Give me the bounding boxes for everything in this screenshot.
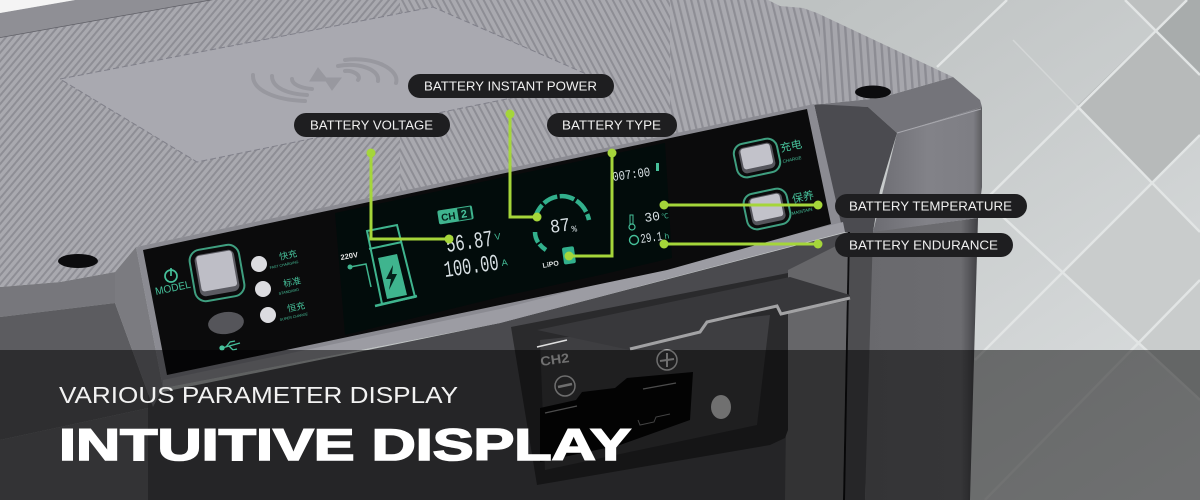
area right of the lid <box>785 240 848 500</box>
clock readout: 007:00 <box>611 165 651 185</box>
channel tag: 2 <box>460 208 468 221</box>
maintain button: 保养 <box>791 188 815 206</box>
icon: charging station: 220V <box>340 250 359 262</box>
title: INTUITIVE DISPLAY <box>59 421 631 470</box>
callout: battery temperature: BATTERY TEMPERATURE <box>849 200 1012 214</box>
battery gauge: % <box>571 224 578 235</box>
temperature readout: 30 <box>643 209 661 226</box>
mode indicators: 快充 <box>278 247 298 262</box>
body: central front <box>148 232 848 500</box>
compartment recess <box>540 315 770 470</box>
callout: battery instant power <box>408 74 614 222</box>
output compartment <box>511 273 850 485</box>
model button <box>188 243 246 303</box>
callout: battery instant power: BATTERY INSTANT POWER <box>424 80 597 94</box>
battery gauge: 87 <box>549 214 572 239</box>
bottom dark overlay band <box>0 350 1200 500</box>
icon: USB <box>220 341 240 350</box>
holes <box>58 254 98 268</box>
callout: battery voltage: BATTERY VOLTAGE <box>310 118 433 132</box>
corner: dark facet <box>814 104 897 232</box>
voltage and current readout: A <box>501 257 508 268</box>
mode indicators: STANDARD <box>278 288 300 296</box>
mode indicators: 恒充 <box>286 299 306 314</box>
temperature readout: ℃ <box>661 212 669 221</box>
callout: battery type: BATTERY TYPE <box>562 118 661 132</box>
body: left upper band <box>0 272 115 317</box>
callout: battery voltage <box>294 113 454 244</box>
body: left recessed area <box>0 303 153 440</box>
panel bezel <box>136 104 843 388</box>
callout: battery endurance <box>660 233 1013 257</box>
power icon and MODEL label <box>154 268 192 298</box>
endurance readout: h <box>664 231 670 241</box>
wireless charging pad <box>60 7 600 162</box>
charge button: CHARGE <box>782 155 802 164</box>
USB button <box>207 310 245 336</box>
body: dark vertical strip <box>843 232 873 500</box>
charge button: 充电 <box>779 137 803 155</box>
battery gauge <box>535 196 589 250</box>
callout: battery temperature <box>660 194 1027 218</box>
display area <box>335 143 672 335</box>
plus terminal <box>657 350 677 370</box>
minus terminal <box>555 376 575 396</box>
voltage and current readout: 56.87 <box>444 227 495 259</box>
compartment frame <box>511 273 788 485</box>
body: left lower area <box>0 407 153 500</box>
callout: battery endurance: BATTERY ENDURANCE <box>849 238 998 252</box>
control panel <box>136 104 845 388</box>
subtitle: VARIOUS PARAMETER DISPLAY <box>59 382 458 408</box>
device body <box>0 77 982 500</box>
mode indicators: SUPER CHARGE <box>279 312 309 322</box>
icon: wireless charging <box>253 59 396 101</box>
CH2 label: CH2 <box>539 350 570 369</box>
CH2 label <box>537 340 570 369</box>
port block <box>540 372 693 462</box>
body: right lower side <box>865 218 978 500</box>
mode indicators <box>251 247 309 323</box>
indicator lamp <box>711 395 731 419</box>
hinged lid <box>537 277 850 350</box>
mode indicators: 标准 <box>282 274 302 289</box>
mode indicators: FAST CHARGING <box>269 260 299 270</box>
maintain button <box>742 187 815 231</box>
corner: side facet <box>873 107 982 232</box>
power icon and MODEL label: MODEL <box>154 279 192 298</box>
panel black face <box>143 109 831 375</box>
endurance readout: 29.1 <box>639 229 663 247</box>
icon: charging station <box>340 225 417 306</box>
channel tag: CH <box>441 211 457 224</box>
callout: battery type <box>547 113 677 260</box>
charge button <box>732 137 803 179</box>
endurance readout <box>630 229 670 247</box>
voltage and current readout: V <box>494 231 501 242</box>
battery type: LiPO <box>542 260 560 270</box>
temperature readout <box>629 209 669 230</box>
body: left corner bevel <box>115 247 163 407</box>
voltage and current readout <box>442 227 508 284</box>
corner: top bevel facet <box>812 77 982 133</box>
channel tag <box>437 205 474 225</box>
maintain button: MAINTAIN <box>791 207 813 216</box>
voltage and current readout: 100.00 <box>442 251 500 284</box>
top surface <box>0 0 990 300</box>
battery type <box>542 246 576 270</box>
